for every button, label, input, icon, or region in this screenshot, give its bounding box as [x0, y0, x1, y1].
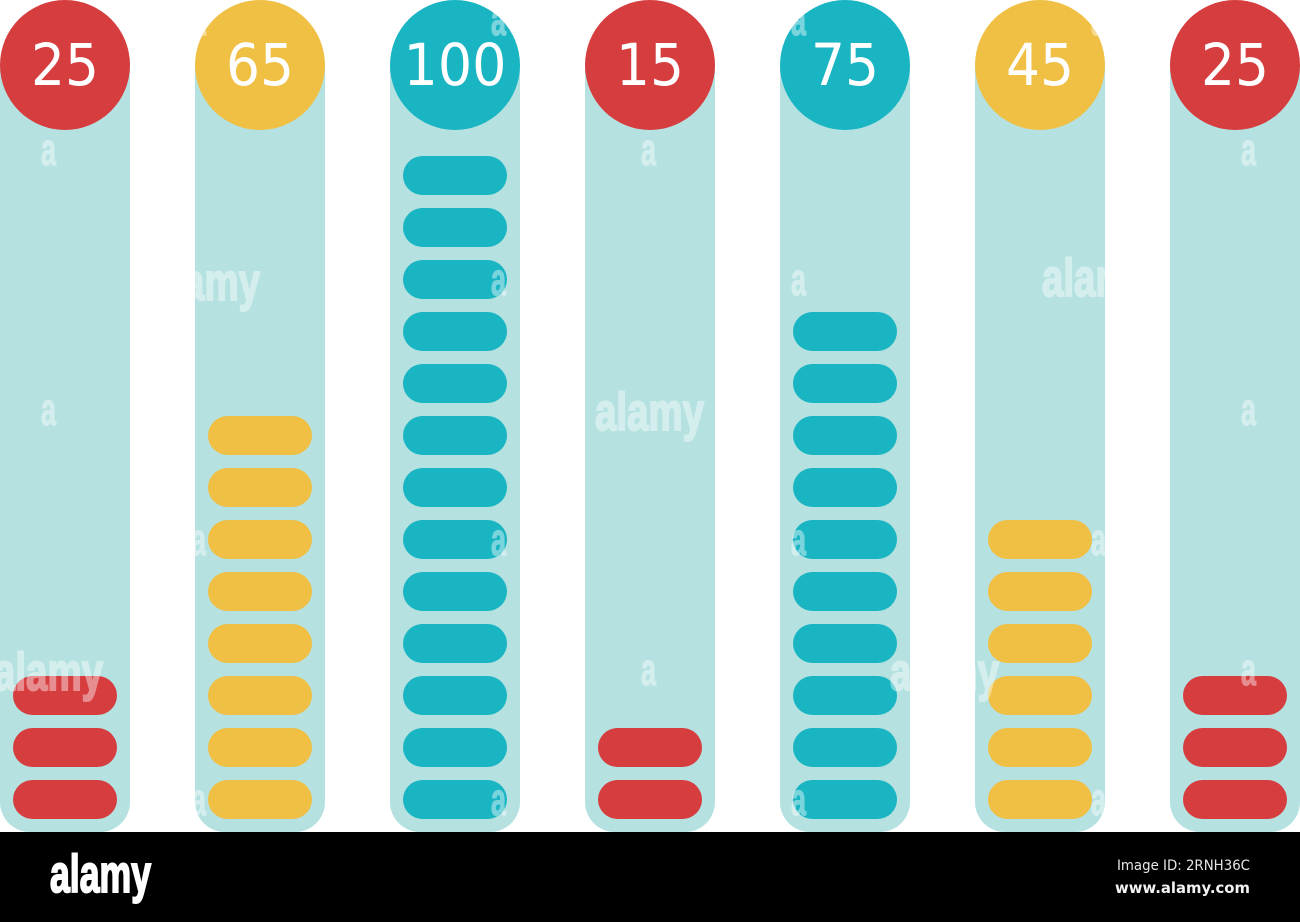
watermarks: alamy [1042, 249, 1151, 308]
column 3: value 100: 100 [404, 31, 506, 99]
footer logo: alamy [50, 845, 151, 904]
watermarks: alamy [890, 643, 999, 702]
watermarks: a [491, 254, 507, 305]
watermarks: a [491, 514, 507, 565]
watermarks: a [41, 124, 57, 175]
column 4: value 15 [585, 0, 715, 832]
website: www.alamy.com [1115, 879, 1250, 897]
column 4: value 15: 15 [616, 31, 684, 99]
column 6: value 45: 45 [1006, 31, 1074, 99]
column 5: value 75 [780, 0, 910, 832]
watermarks: alamy [890, 643, 999, 702]
watermarks: a [791, 254, 807, 305]
column 2: value 65: 65 [226, 31, 294, 99]
watermarks: a [1241, 124, 1257, 175]
column 3: value 100 [390, 0, 520, 832]
watermarks: a [1241, 384, 1257, 435]
watermarks: a [1091, 514, 1107, 565]
column 7: value 25: 25 [1201, 31, 1269, 99]
column 5: value 75: 75 [811, 31, 879, 99]
column 6: value 45 [975, 0, 1105, 832]
watermarks: a [191, 514, 207, 565]
column 1: value 25: 25 [31, 31, 99, 99]
watermarks: a [1241, 644, 1257, 695]
image id: Image ID: 2RNH36C [1117, 858, 1250, 874]
watermarks: a [641, 124, 657, 175]
watermarks: a [191, 774, 207, 825]
watermarks: a [41, 384, 57, 435]
watermarks: alamy [595, 383, 704, 442]
watermarks: a [1091, 774, 1107, 825]
watermarks: a [491, 774, 507, 825]
footer bar [0, 832, 1300, 922]
watermarks: a [791, 514, 807, 565]
column 7: value 25 [1170, 0, 1300, 832]
column 1: value 25 [0, 0, 130, 832]
column 2: value 65 [195, 0, 325, 832]
watermarks: a [791, 774, 807, 825]
watermarks: a [641, 644, 657, 695]
watermarks: alamy [151, 253, 260, 312]
